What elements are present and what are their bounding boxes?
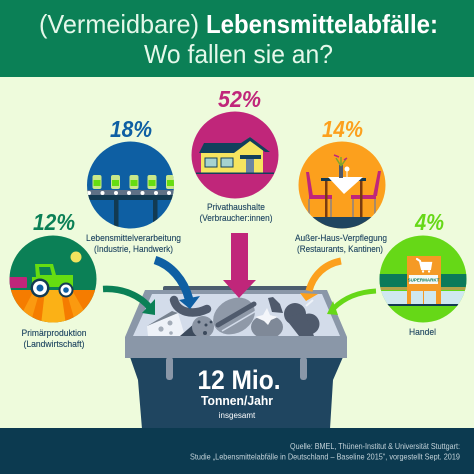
label [200,202,273,223]
panel: Privathaushalte [192,86,278,223]
icon: conveyor belt with jars [87,175,174,227]
label: (Industrie, Handwerk) [94,244,173,254]
panel: Handel [380,214,466,335]
panel: Primärproduktion [10,214,96,349]
panel: Außer-Haus-Verpflegung: 14% [322,116,363,142]
total amount: Tonnen/Jahr [201,393,273,408]
header banner [0,0,474,77]
panel: Primärproduktion: 12% [33,209,75,235]
title: (Vermeidbare) [39,9,199,39]
total amount [198,365,280,420]
icon: restaurant table [306,154,381,228]
title: Wo fallen sie an? [144,39,333,69]
label: Außer-Haus-Verpflegung [295,233,387,243]
label: Primärproduktion [22,328,86,338]
total amount: insgesamt [219,411,256,420]
panel: Lebensmittelverarbeitung [85,116,181,254]
icon: house [196,137,274,174]
label: (Restaurants, Kantinen) [297,244,383,254]
arrow: Privathaushalte [223,233,256,298]
label [22,328,86,349]
icon: tractor in field [10,252,95,322]
title [39,9,438,69]
label [295,233,387,254]
panel: Handel: 4% [414,209,444,235]
icon: supermarket: SUPERMARKT [408,278,440,282]
label: Privathaushalte [207,202,265,212]
bin body [130,357,343,429]
label: (Landwirtschaft) [24,339,84,349]
label: Handel [409,327,436,337]
source text [190,441,460,462]
label [86,233,181,254]
title: Lebensmittelabfälle: [206,9,438,39]
label: Lebensmittelverarbeitung [86,233,181,243]
panel: Außer-Haus-Verpflegung [295,116,387,254]
arrow: Primärproduktion [103,289,155,315]
panel: Lebensmittelverarbeitung: 18% [110,116,152,142]
arrow: Außer-Haus-Verpflegung [300,261,341,301]
arrow: Handel [327,291,376,315]
footer [0,428,474,474]
food waste [147,296,320,336]
label: (Verbraucher:innen) [200,213,273,223]
arrow: Lebensmittelverarbeitung [155,260,200,309]
bin [125,286,347,429]
panel: Privathaushalte: 52% [218,86,261,112]
total amount: 12 Mio. [198,365,280,395]
